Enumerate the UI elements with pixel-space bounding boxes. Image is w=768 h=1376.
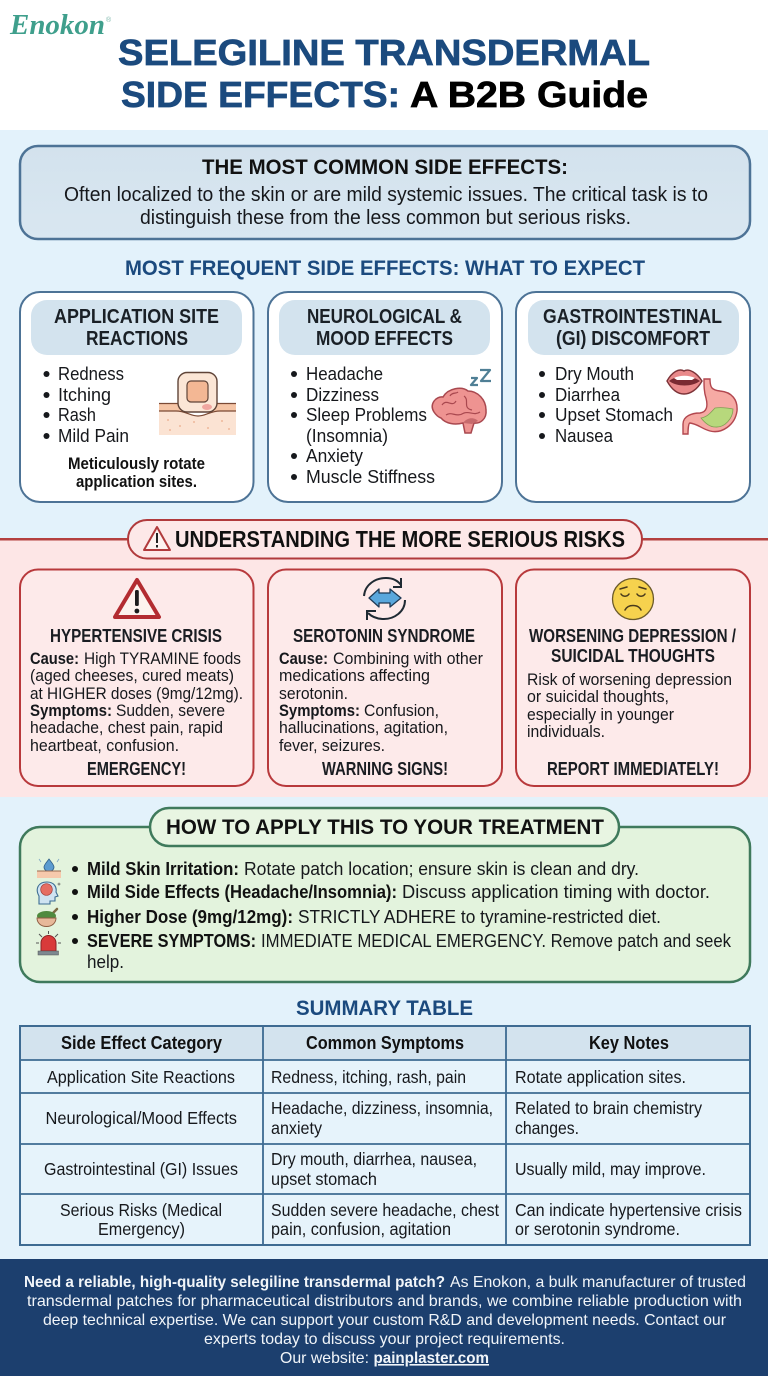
title (118, 32, 650, 115)
table row: neurological and mood effects: Related to brain chemistry (515, 1098, 702, 1118)
panel: neurological and mood effects: Muscle Stiffness (306, 466, 435, 487)
heading pill: understanding the more serious risks: UNDERSTANDING THE MORE SERIOUS RISKS (175, 526, 625, 552)
table header row: Key Notes (589, 1032, 669, 1053)
panel: hypertensive crisis: EMERGENCY! (87, 759, 186, 779)
table row: gastrointestinal issues: Usually mild, may improve. (515, 1159, 706, 1179)
panel: gastrointestinal discomfort: Dry Mouth (555, 363, 634, 384)
icon: stomach (683, 379, 737, 434)
title: SIDE EFFECTS: (121, 74, 400, 115)
table row: serious risks: Serious Risks (Medical (60, 1200, 222, 1220)
band: serious risks (0, 520, 768, 797)
panel: how to apply (20, 808, 750, 982)
panel: worsening depression: WORSENING DEPRESSION / (529, 626, 736, 646)
panel: gastrointestinal discomfort: GASTROINTESTINAL (543, 305, 722, 328)
table row: serious risks (60, 1200, 742, 1239)
panel: hypertensive crisis: Cause: (30, 649, 79, 668)
panel: application site reactions: REACTIONS (86, 327, 188, 350)
panel: serotonin syndrome: medications affecting (279, 666, 430, 685)
panel: serotonin syndrome: serotonin. (279, 684, 348, 703)
panel: neurological and mood effects: (Insomnia) (306, 425, 388, 446)
panel: worsening depression (516, 570, 750, 786)
table row: neurological and mood effects: anxiety (271, 1118, 322, 1138)
text block: treatment advice: Mild Skin Irritation: (87, 859, 239, 879)
panel: gastrointestinal discomfort: Upset Stomach (555, 404, 673, 425)
panel: application site reactions: Itching (58, 384, 111, 405)
icon: skin droplet (37, 859, 61, 878)
icon: serotonin arrows (364, 578, 405, 620)
panel: gastrointestinal discomfort (516, 292, 750, 502)
panel: application site reactions: Rash (58, 404, 96, 425)
panel: serotonin syndrome: Cause: (279, 649, 328, 668)
icon: sad face (612, 578, 654, 620)
heading: most frequent side effects: MOST FREQUENT SIDE EFFECTS: WHAT TO EXPECT (125, 257, 645, 280)
table row: application site reactions: Application Site Reactions (47, 1067, 235, 1087)
panel: gastrointestinal discomfort: (GI) DISCOMFORT (556, 327, 710, 350)
text block: treatment advice: SEVERE SYMPTOMS: (87, 931, 256, 951)
panel: serotonin syndrome: Symptoms: (279, 701, 360, 720)
panel: neurological and mood effects (268, 292, 502, 502)
table row: neurological and mood effects: Neurological/Mood Effects (46, 1108, 237, 1128)
table header row: Side Effect Category (61, 1032, 223, 1053)
table row: application site reactions (47, 1067, 686, 1087)
panel: serotonin syndrome: Combining with other (333, 649, 483, 668)
panel: serotonin syndrome (268, 570, 502, 786)
heading pill: how to apply: HOW TO APPLY THIS TO YOUR TREATMENT (166, 816, 604, 839)
table row: gastrointestinal issues: Dry mouth, diarrhea, nausea, (271, 1149, 477, 1169)
icon: patch on skin (159, 372, 236, 435)
panel: hypertensive crisis: Sudden, severe (116, 701, 225, 720)
panel: serotonin syndrome: SEROTONIN SYNDROME (293, 626, 475, 646)
text block: treatment advice: IMMEDIATE MEDICAL EMERGENCY. Remove patch and seek (261, 931, 732, 951)
panel: application site reactions: Meticulously rotate (68, 455, 205, 473)
panel: application site reactions: Redness (58, 363, 124, 384)
panel: serotonin syndrome: fever, seizures. (279, 736, 385, 755)
panel: neurological and mood effects: MOOD EFFECTS (316, 327, 453, 350)
panel: hypertensive crisis (20, 570, 254, 786)
panel: neurological and mood effects: Dizziness (306, 384, 379, 405)
table row: serious risks: Sudden severe headache, chest (271, 1200, 499, 1220)
panel: hypertensive crisis: headache, chest pain, rapid (30, 718, 223, 737)
panel: serotonin syndrome: Confusion, (364, 701, 439, 720)
panel: worsening depression: REPORT IMMEDIATELY! (547, 759, 719, 779)
icon: alarm siren (36, 931, 61, 955)
title: SELEGILINE TRANSDERMAL (118, 32, 650, 73)
logo: Enokon: Enokon (9, 10, 105, 41)
table row: serious risks: or serotonin syndrome. (515, 1219, 680, 1239)
heading pill: understanding the more serious risks (128, 520, 642, 558)
panel: hypertensive crisis: HYPERTENSIVE CRISIS (50, 626, 222, 646)
footer: call to action: painplaster.com (374, 1350, 489, 1367)
footer: call to action: experts today to discuss your project requirements. (204, 1331, 565, 1348)
table row: application site reactions: Redness, itching, rash, pain (271, 1067, 466, 1087)
heading: summary table: SUMMARY TABLE (296, 997, 473, 1020)
panel: application site reactions: Mild Pain (58, 425, 129, 446)
panel: worsening depression: Risk of worsening depression (527, 670, 732, 689)
panel: serotonin syndrome: WARNING SIGNS! (322, 759, 448, 779)
panel: most common side effects intro: distinguish these from the less common but serious risks. (140, 207, 631, 229)
panel: neurological and mood effects: NEUROLOGICAL & (307, 305, 462, 328)
table row: application site reactions: Rotate application sites. (515, 1067, 686, 1087)
panel: hypertensive crisis: at HIGHER doses (9mg/12mg). (30, 684, 243, 703)
icon: warning triangle (115, 580, 159, 617)
text block: treatment advice: Discuss application timing with doctor. (402, 882, 710, 902)
summary table (20, 1026, 750, 1245)
text block: treatment advice: Mild Side Effects (Headache/Insomnia): (87, 882, 397, 902)
footer: call to action: transdermal patches for pharmaceutical distributors and brands, we combine reliable production with (27, 1293, 742, 1310)
table row: serious risks: Can indicate hypertensive crisis (515, 1200, 742, 1220)
footer: call to action: deep technical expertise. We can support your custom R&D and development needs. Contact our (43, 1312, 727, 1329)
panel: application site reactions: application sites. (76, 473, 197, 491)
panel: hypertensive crisis: heartbeat, confusion. (30, 736, 179, 755)
text block: treatment advice: help. (87, 952, 124, 972)
panel: worsening depression: or suicidal thoughts, (527, 687, 669, 706)
table header row (61, 1032, 669, 1053)
panel: hypertensive crisis: Symptoms: (30, 701, 112, 720)
logo: Enokon: ® (106, 16, 112, 24)
heading pill: how to apply (150, 808, 619, 846)
panel: most common side effects intro: THE MOST COMMON SIDE EFFECTS: (202, 156, 568, 179)
panel: most common side effects intro: Often localized to the skin or are mild systemic issues. The critical task is to (64, 184, 708, 206)
panel: neurological and mood effects: Anxiety (306, 445, 364, 466)
text block: treatment advice: Rotate patch location; ensure skin is clean and dry. (244, 859, 639, 879)
table row: serious risks: Emergency) (98, 1219, 185, 1239)
panel: worsening depression: individuals. (527, 722, 605, 741)
table row: neurological and mood effects: Headache, dizziness, insomnia, (271, 1098, 493, 1118)
panel: neurological and mood effects: Sleep Problems (306, 404, 427, 425)
panel: hypertensive crisis: (aged cheeses, cured meats) (30, 666, 234, 685)
panel: worsening depression: especially in younger (527, 705, 674, 724)
table row: gastrointestinal issues: Gastrointestinal (GI) Issues (44, 1159, 238, 1179)
table row: neurological and mood effects: changes. (515, 1118, 579, 1138)
text block: treatment advice: STRICTLY ADHERE to tyramine-restricted diet. (298, 907, 661, 927)
panel: hypertensive crisis: High TYRAMINE foods (84, 649, 241, 668)
icon: head with brain (37, 882, 60, 904)
footer: call to action: Need a reliable, high-quality selegiline transdermal patch? (24, 1274, 445, 1291)
panel: worsening depression: SUICIDAL THOUGHTS (551, 646, 715, 666)
text block: treatment advice (87, 859, 732, 972)
footer: call to action: As Enokon, a bulk manufacturer of trusted (450, 1274, 746, 1291)
panel: gastrointestinal discomfort: Nausea (555, 425, 614, 446)
icon: mouth (667, 370, 702, 394)
table row: gastrointestinal issues: upset stomach (271, 1169, 377, 1189)
table row: serious risks: pain, confusion, agitation (271, 1219, 451, 1239)
panel: gastrointestinal discomfort: Diarrhea (555, 384, 621, 405)
icon: herb bowl (37, 909, 57, 926)
table header row: Common Symptoms (306, 1032, 464, 1053)
title: A B2B Guide (410, 74, 648, 115)
panel: application site reactions: APPLICATION SITE (54, 305, 219, 328)
text block: treatment advice: Higher Dose (9mg/12mg): (87, 907, 293, 927)
table row: neurological and mood effects (46, 1098, 702, 1138)
footer: call to action (0, 1259, 768, 1376)
panel: serotonin syndrome: hallucinations, agitation, (279, 718, 448, 737)
footer: call to action: Our website: (280, 1350, 369, 1367)
panel: application site reactions (20, 292, 254, 502)
panel: most common side effects intro (20, 146, 750, 239)
panel: neurological and mood effects: Headache (306, 363, 383, 384)
table row: gastrointestinal issues (44, 1149, 706, 1189)
icon: sleeping brain (432, 370, 491, 433)
